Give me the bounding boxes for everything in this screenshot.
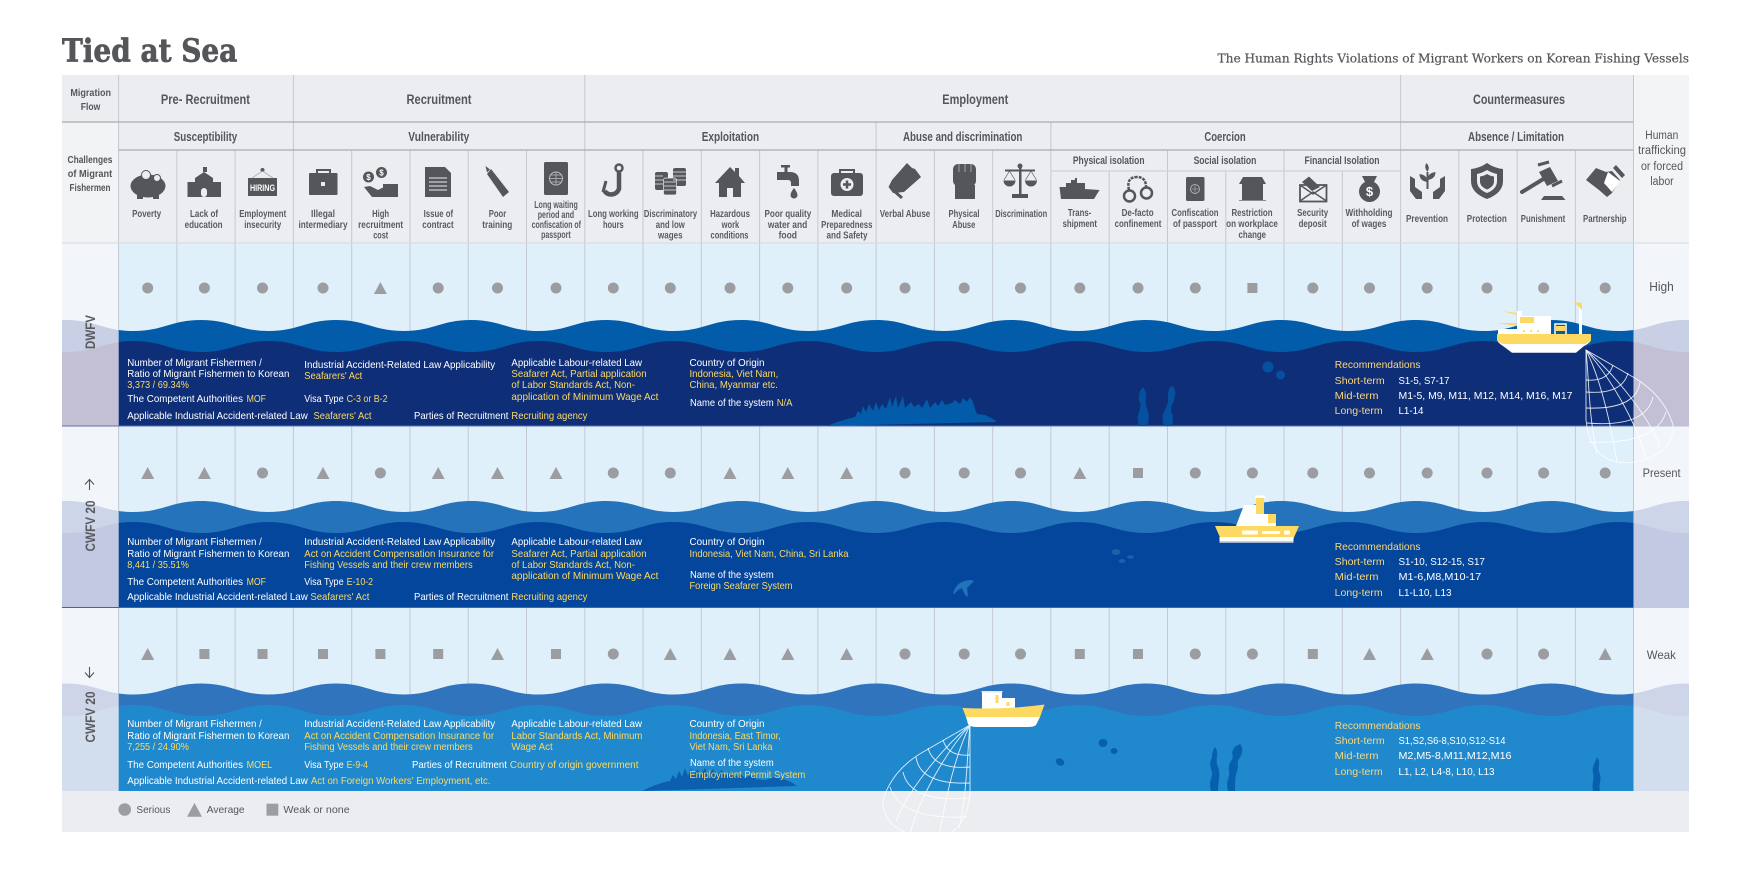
CWFV 20 up facts: The Competent Authorities	[127, 576, 243, 588]
panel: challenge labels: Punishment	[1521, 214, 1566, 225]
CWFV 20 up recommendations	[1335, 541, 1485, 599]
right column heading: labor	[1650, 176, 1674, 188]
CWFV 20 up facts: Recruiting agency	[511, 591, 588, 603]
legend: weak or none: Weak or none	[283, 804, 350, 816]
panel: challenge labels: Partnership	[1583, 214, 1627, 225]
CWFV 20 down facts: Country of Origin	[690, 718, 765, 730]
panel: challenge labels: Long waiting	[534, 200, 578, 211]
CWFV 20 up facts: Number of Migrant Fishermen /	[127, 536, 262, 548]
CWFV 20 up facts: E-10-2	[347, 576, 373, 588]
DWFV rotated label: DWFV	[82, 314, 98, 349]
CWFV 20 up recommendations: Short-term	[1335, 556, 1385, 568]
severity: High: High	[1649, 279, 1674, 294]
DWFV facts: application of Minimum Wage Act	[511, 391, 658, 403]
panel: challenge labels: Prevention	[1406, 214, 1448, 225]
panel: challenge labels: Lack of	[190, 209, 219, 220]
panel: challenge labels: hours	[603, 220, 624, 231]
right column heading	[1638, 130, 1686, 188]
icon: envelope with money	[1300, 176, 1326, 202]
panel: challenge labels: cost	[373, 230, 389, 242]
panel: challenges sub-headers: Abuse and discrimination	[903, 130, 1022, 144]
seaweed	[1210, 744, 1600, 791]
panel: challenge labels: recruitment	[358, 220, 404, 231]
panel: migration flow header: Recruitment	[406, 92, 472, 107]
DWFV facts: N/A	[777, 397, 792, 409]
CWFV 20 up recommendations: L1-L10, L13	[1398, 587, 1452, 599]
icon: house	[715, 167, 745, 197]
panel: challenge labels: change	[1239, 230, 1266, 241]
CWFV 20 down recommendations	[1335, 720, 1512, 778]
icon: hiring sign	[248, 168, 277, 196]
panel: challenge labels: food	[779, 230, 797, 242]
DWFV facts: Ratio of Migrant Fishermen to Korean	[127, 368, 290, 380]
icon: gavel	[1522, 162, 1566, 200]
CWFV 20 up facts: Act on Accident Compensation Insurance for	[304, 548, 495, 560]
icon: briefcase	[309, 170, 338, 195]
boat: CWFV up vessel	[1215, 496, 1299, 543]
DWFV recommendations: Long-term	[1335, 405, 1383, 417]
severity marks: CWFV 20 up	[141, 467, 1611, 479]
panel: migration flow header: Employment	[942, 92, 1009, 107]
title: Tied at Sea	[62, 32, 237, 70]
CWFV 20 up facts: Seafarer Act, Partial application	[511, 548, 647, 560]
fishing net: DWFV boat	[1586, 350, 1673, 463]
panel: challenge labels: Restriction	[1232, 208, 1272, 219]
panel: challenge labels: deposit	[1299, 219, 1327, 230]
legend: average: Average	[207, 804, 245, 816]
DWFV facts: Country of Origin	[690, 357, 765, 369]
CWFV 20 up facts: Industrial Accident-Related Law Applicability	[304, 536, 496, 548]
icon: piggy bank	[130, 170, 166, 199]
panel: DWFV zone	[62, 282, 1689, 426]
CWFV 20 down facts: Ratio of Migrant Fishermen to Korean	[127, 730, 290, 742]
zone waves	[62, 684, 1689, 791]
panel: challenges sub-headers: Physical isolation	[1073, 155, 1145, 167]
icon: hand with coins: $	[379, 168, 384, 178]
panel: challenge labels: De-facto	[1122, 208, 1154, 219]
CWFV 20 down facts: Applicable Labour-related Law	[511, 718, 642, 730]
fish	[1262, 362, 1285, 380]
CWFV 20 down facts: 7,255 / 24.90%	[127, 741, 189, 753]
panel: challenge labels: Security	[1297, 208, 1328, 219]
panel: migration flow header	[70, 87, 1565, 113]
panel: migration flow header: Flow	[81, 101, 101, 113]
fish	[1054, 739, 1118, 767]
CWFV 20 up facts: Name of the system	[690, 569, 774, 581]
icon: scales	[1004, 164, 1037, 198]
severity marks: DWFV	[142, 282, 1611, 294]
icon: hands with plant	[1410, 163, 1445, 199]
icon: shield	[1471, 163, 1503, 199]
CWFV 20 up facts: Ratio of Migrant Fishermen to Korean	[127, 548, 290, 560]
panel: challenges sub-headers: Vulnerability	[408, 130, 469, 144]
DWFV facts: MOF	[247, 393, 266, 405]
panel: challenge labels: contract	[422, 220, 454, 231]
DWFV facts: C-3 or B-2	[347, 393, 388, 405]
panel: challenges sub-headers: Coercion	[1204, 130, 1246, 144]
severity marks: CWFV 20 down	[141, 648, 1612, 660]
icon: ship	[1060, 178, 1100, 199]
CWFV 20 up recommendations: Mid-term	[1335, 571, 1379, 583]
panel: challenge icons	[130, 162, 1625, 202]
panel: challenge labels: passport	[541, 230, 571, 241]
panel: challenges sub-headers: of Migrant	[68, 168, 113, 180]
CWFV 20 down facts: Employment Permit System	[690, 769, 806, 781]
panel: challenge labels: conditions	[711, 230, 749, 242]
panel: challenge labels: Confiscation	[1172, 208, 1218, 219]
DWFV facts: China, Myanmar etc.	[690, 379, 778, 391]
panel: challenges sub-headers: Challenges	[68, 154, 113, 166]
DWFV facts: Name of the system	[690, 397, 774, 409]
DWFV recommendations: Recommendations	[1335, 359, 1420, 371]
CWFV 20 down facts: The Competent Authorities	[127, 759, 243, 771]
CWFV 20 up facts: Foreign Seafarer System	[690, 580, 793, 592]
DWFV facts: of Labor Standards Act, Non-	[511, 379, 635, 391]
panel: challenge labels: on workplace	[1226, 219, 1278, 230]
CWFV 20 down recommendations: Mid-term	[1335, 750, 1379, 762]
panel: challenge labels: Verbal Abuse	[880, 209, 931, 220]
coral reef	[642, 768, 797, 791]
icon: school	[188, 167, 221, 197]
icon: contract	[425, 167, 451, 197]
icon: hiring sign: HIRING	[250, 183, 275, 193]
panel: challenge labels: confinement	[1115, 219, 1162, 230]
panel: challenge labels: period and	[538, 210, 574, 221]
icon: money bag	[1359, 176, 1380, 202]
DWFV facts: Seafarers' Act	[314, 410, 372, 422]
icon: megaphone	[888, 163, 921, 198]
panel: legend bar	[62, 791, 1689, 832]
DWFV facts: 3,373 / 69.34%	[127, 379, 189, 391]
panel: challenge labels: Hazardous	[710, 209, 750, 220]
DWFV facts: Applicable Labour-related Law	[511, 357, 642, 369]
CWFV 20 up facts: application of Minimum Wage Act	[511, 570, 658, 582]
panel: challenge labels: of passport	[1173, 219, 1218, 230]
CWFV 20 up recommendations: M1-6,M8,M10-17	[1398, 571, 1481, 583]
legend: serious	[118, 803, 170, 816]
CWFV 20 down recommendations: Short-term	[1335, 735, 1385, 747]
CWFV 20 up facts: Visa Type	[304, 576, 344, 588]
turtle	[953, 580, 974, 597]
DWFV recommendations: Mid-term	[1335, 390, 1379, 402]
CWFV 20 down facts: Industrial Accident-Related Law Applicability	[304, 718, 496, 730]
CWFV 20 down facts: Number of Migrant Fishermen /	[127, 718, 262, 730]
panel: challenge labels: and Safety	[826, 230, 868, 242]
CWFV 20 down facts: Wage Act	[511, 741, 553, 753]
boat: DWFV trawler	[1497, 302, 1591, 353]
icon: medical kit	[831, 170, 863, 196]
CWFV 20 down facts: Act on Foreign Workers' Employment, etc.	[311, 775, 490, 787]
CWFV 20 up facts: Applicable Industrial Accident-related Law	[127, 591, 308, 603]
CWFV 20 down facts: Applicable Industrial Accident-related Law	[127, 775, 308, 787]
panel: challenge labels: Long working	[588, 209, 639, 220]
panel: challenge labels: training	[482, 220, 512, 231]
DWFV recommendations	[1335, 359, 1573, 417]
panel: challenge labels: Employment	[239, 209, 287, 220]
panel: challenge labels: intermediary	[298, 220, 348, 231]
CWFV 20 up facts: Indonesia, Viet Nam, China, Sri Lanka	[690, 548, 849, 560]
CWFV 20 down facts	[127, 718, 806, 787]
fishing net: small boat	[883, 725, 970, 838]
panel: challenge labels: Medical	[831, 209, 862, 220]
icon: hand with coins	[363, 167, 398, 197]
DWFV facts	[127, 357, 792, 422]
panel: challenge labels: Issue of	[424, 209, 454, 220]
panel: challenge labels: confiscation of	[532, 220, 581, 231]
icon: fish hook	[603, 164, 622, 194]
DWFV facts: Recruiting agency	[511, 410, 588, 422]
CWFV 20 up facts: of Labor Standards Act, Non-	[511, 559, 635, 571]
CWFV 20 down facts: Country of origin government	[510, 759, 639, 771]
panel: challenge labels: shipment	[1063, 219, 1098, 230]
panel: challenge labels: Trans-	[1068, 208, 1091, 219]
panel: zone backgrounds	[62, 243, 1689, 791]
panel: challenge labels: Poor quality	[765, 209, 812, 220]
DWFV facts: Parties of Recruitment	[414, 410, 508, 422]
CWFV 20 up recommendations: Long-term	[1335, 587, 1383, 599]
CWFV 20 up facts: Country of Origin	[690, 536, 765, 548]
CWFV 20 down facts: Viet Nam, Sri Lanka	[690, 741, 773, 753]
panel: challenge labels: Protection	[1467, 214, 1507, 225]
panel: challenge labels: Poverty	[132, 209, 161, 220]
panel: migration flow header: Countermeasures	[1473, 92, 1565, 107]
DWFV facts: Applicable Industrial Accident-related Law	[127, 410, 308, 422]
CWFV 20 up facts: Fishing Vessels and their crew members	[304, 559, 473, 571]
panel: challenge labels: Preparedness	[821, 220, 873, 231]
DWFV facts: Seafarer Act, Partial application	[511, 368, 647, 380]
icon: water tap	[777, 165, 799, 198]
zone waves	[62, 320, 1689, 426]
CWFV 20 down facts: MOEL	[247, 759, 272, 771]
panel: challenges sub-headers: Fishermen	[70, 182, 110, 194]
CWFV 20 up recommendations: S1-10, S12-15, S17	[1398, 556, 1485, 568]
severity: Weak: Weak	[1647, 648, 1677, 662]
panel: challenge labels: Withholding	[1346, 208, 1392, 219]
panel: challenge labels: and low	[656, 220, 685, 231]
CWFV 20 up recommendations: Recommendations	[1335, 541, 1420, 553]
zone waves	[62, 501, 1689, 608]
panel: challenges sub-headers: Absence / Limitation	[1468, 130, 1564, 144]
CWFV 20 down recommendations: S1,S2,S6-8,S10,S12-S14	[1398, 735, 1506, 747]
CWFV 20 down facts: Act on Accident Compensation Insurance for	[304, 730, 495, 742]
CWFV 20 up facts	[127, 536, 849, 603]
panel: challenge labels	[132, 200, 1627, 242]
panel: challenge labels: Physical	[948, 209, 980, 220]
legend: average	[187, 803, 245, 817]
right column heading: or forced	[1641, 161, 1683, 173]
icon: handcuffs	[1124, 177, 1152, 202]
DWFV recommendations: L1-14	[1398, 405, 1424, 417]
panel: challenge labels: Poor	[489, 209, 506, 220]
DWFV facts: Visa Type	[304, 393, 344, 405]
CWFV 20 down recommendations: Long-term	[1335, 766, 1383, 778]
panel: challenge labels: wages	[657, 230, 683, 242]
CWFV 20 down facts: Fishing Vessels and their crew members	[304, 741, 473, 753]
CWFV 20 down recommendations: M2,M5-8,M11,M12,M16	[1398, 750, 1512, 762]
CWFV 20 up facts: Applicable Labour-related Law	[511, 536, 642, 548]
fish	[1112, 549, 1134, 563]
CWFV 20 up facts: 8,441 / 35.51%	[127, 559, 189, 571]
legend: serious: Serious	[136, 804, 170, 816]
subtitle: The Human Rights Violations of Migrant Workers on Korean Fishing Vessels	[1218, 50, 1689, 65]
DWFV recommendations: M1-5, M9, M11, M12, M14, M16, M17	[1398, 390, 1573, 402]
panel: challenge labels: Discrimination	[995, 209, 1047, 220]
CWFV 20 down facts: Name of the system	[690, 757, 774, 769]
panel: challenge labels: Abuse	[952, 220, 976, 231]
CWFV 20 down recommendations: L1, L2, L4-8, L10, L13	[1398, 766, 1495, 778]
DWFV facts: The Competent Authorities	[127, 393, 243, 405]
icon: fist	[953, 164, 976, 199]
panel: table header backgrounds	[62, 75, 1689, 243]
panel: challenges sub-headers: Exploitation	[702, 130, 759, 144]
panel: challenge labels: Discriminatory	[644, 209, 697, 220]
panel: migration flow header: Migration	[70, 87, 111, 99]
DWFV facts: Indonesia, Viet Nam,	[690, 368, 778, 380]
arrow down and CWFV label: CWFV 20	[82, 691, 98, 742]
DWFV facts: Industrial Accident-Related Law Applicability	[304, 359, 496, 371]
DWFV facts: Number of Migrant Fishermen /	[127, 357, 262, 369]
panel: challenge labels: of wages	[1352, 219, 1387, 230]
panel: challenge labels: High	[372, 209, 389, 220]
panel: CWFV over 20 zone	[62, 468, 1689, 608]
panel: challenges sub-headers: Financial Isolation	[1304, 155, 1380, 167]
icon: workplace	[1239, 177, 1266, 201]
panel: challenge labels: education	[185, 220, 223, 231]
icon: passport	[544, 162, 568, 195]
CWFV 20 down facts: Indonesia, East Timor,	[690, 730, 781, 742]
icon: money bag: $	[1366, 184, 1374, 199]
panel: challenge labels: insecurity	[244, 220, 282, 231]
CWFV 20 up facts: MOF	[247, 576, 266, 588]
seaweed	[1138, 386, 1175, 426]
icon: coin stacks	[655, 168, 686, 195]
CWFV 20 down facts: Visa Type	[304, 759, 344, 771]
panel: CWFV under 20 zone	[62, 650, 1689, 791]
panel: challenge labels: Illegal	[311, 209, 335, 220]
severity: Present: Present	[1643, 466, 1681, 480]
right column heading: Human	[1645, 130, 1678, 142]
panel: challenges sub-headers: Susceptibility	[174, 130, 237, 144]
panel: migration flow header: Pre- Recruitment	[161, 92, 250, 107]
icon: hand with coins: $	[366, 173, 371, 182]
icon: passport small	[1186, 177, 1204, 201]
CWFV 20 up facts: Seafarers' Act	[310, 591, 369, 603]
DWFV recommendations: S1-5, S7-17	[1398, 375, 1450, 387]
panel: challenge labels: work	[721, 220, 740, 231]
right column heading: trafficking	[1638, 145, 1686, 157]
DWFV recommendations: Short-term	[1335, 375, 1385, 387]
panel: challenges sub-headers	[68, 130, 1564, 194]
CWFV 20 down facts: Labor Standards Act, Minimum	[511, 730, 643, 742]
icon: pencil	[486, 166, 509, 197]
CWFV 20 down facts: Parties of Recruitment	[412, 759, 507, 771]
coral reef	[827, 396, 997, 426]
CWFV 20 down recommendations: Recommendations	[1335, 720, 1420, 732]
panel: challenges sub-headers: Social isolation	[1194, 155, 1257, 167]
arrow up and CWFV label: CWFV 20	[82, 500, 98, 552]
boat: CWFV down small vessel	[962, 691, 1044, 727]
icon: handshake	[1586, 165, 1625, 197]
CWFV 20 up facts: Parties of Recruitment	[414, 591, 508, 603]
DWFV facts: Seafarers' Act	[304, 370, 362, 382]
panel: challenge labels: water and	[767, 220, 807, 231]
CWFV 20 down facts: E-9-4	[347, 759, 368, 771]
